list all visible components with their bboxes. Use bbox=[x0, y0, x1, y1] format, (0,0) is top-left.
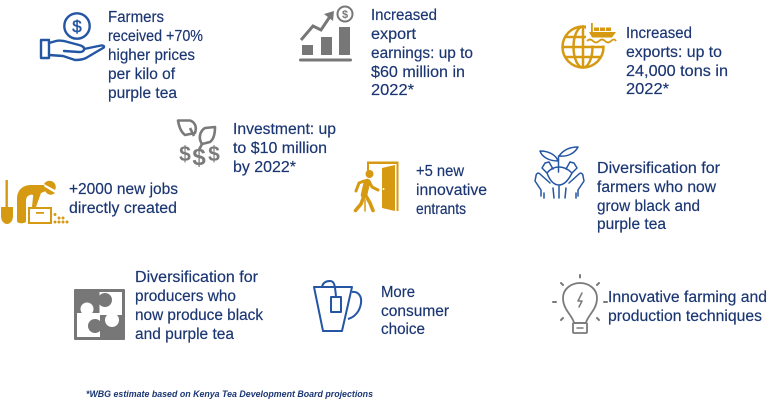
text: investment bbox=[233, 121, 336, 176]
text: diversification for farmers: purple tea bbox=[597, 216, 666, 233]
text: farmers prices: received +70% bbox=[108, 28, 203, 45]
icon: puzzle pieces bbox=[74, 289, 125, 340]
text: consumer choice: consumer bbox=[381, 303, 449, 320]
text: innovative techniques bbox=[608, 289, 767, 325]
icon: hand holding coin: $ bbox=[72, 17, 82, 36]
text: new entrants: +5 new bbox=[416, 163, 465, 180]
icon: light bulb bbox=[553, 275, 607, 333]
text: farmers prices: per kilo of bbox=[108, 66, 176, 83]
text: export earnings bbox=[371, 7, 473, 99]
text: export earnings: $60 million in bbox=[371, 64, 465, 81]
text: diversification for producers bbox=[135, 269, 263, 343]
text: investment: Investment: up bbox=[233, 121, 336, 138]
text: innovative techniques: production techniques bbox=[608, 308, 762, 325]
icon: rising bar chart with coin bbox=[299, 6, 352, 62]
text: consumer choice bbox=[381, 284, 449, 338]
text: farmers prices bbox=[108, 9, 203, 102]
text: increased exports: Increased bbox=[626, 25, 692, 42]
text: new jobs: +2000 new jobs bbox=[69, 181, 178, 198]
footnote: *WBG estimate based on Kenya Tea Development Board projections bbox=[86, 389, 373, 400]
text: new entrants bbox=[416, 163, 487, 218]
text: consumer choice: More bbox=[381, 284, 415, 301]
text: diversification for farmers: grow black and bbox=[597, 198, 700, 215]
text: increased exports bbox=[626, 25, 728, 98]
text: new jobs bbox=[69, 181, 178, 217]
icon: seedling with dollar signs: $ bbox=[192, 144, 206, 171]
text: farmers prices: higher prices bbox=[108, 47, 195, 64]
text: diversification for farmers: farmers who now bbox=[597, 179, 717, 196]
icon: globe with ship bbox=[562, 20, 618, 68]
text: export earnings: earnings: up to bbox=[371, 45, 473, 62]
text: increased exports: exports: up to bbox=[626, 44, 722, 61]
text: increased exports: 2022* bbox=[626, 81, 669, 98]
text: diversification for producers: now produce black bbox=[135, 307, 263, 324]
text: investment: by 2022* bbox=[233, 159, 296, 176]
text: diversification for producers: and purple tea bbox=[135, 326, 234, 343]
icon: tea mug bbox=[314, 281, 361, 331]
text: increased exports: 24,000 tons in bbox=[626, 63, 728, 80]
text: export earnings: Increased bbox=[371, 7, 437, 24]
icon: person entering door bbox=[356, 162, 398, 211]
icon: worker lifting box bbox=[1, 180, 68, 224]
text: export earnings: export bbox=[371, 26, 417, 43]
icon: seedling with dollar signs: $ bbox=[208, 143, 220, 166]
text: investment: to $10 million bbox=[233, 140, 327, 157]
text: consumer choice: choice bbox=[381, 321, 425, 338]
text: new entrants: innovative bbox=[416, 182, 487, 199]
icon: hands holding seedling bbox=[535, 147, 584, 198]
text: diversification for producers: Diversification for bbox=[135, 269, 258, 286]
text: farmers prices: purple tea bbox=[108, 85, 177, 102]
icon: seedling with dollar signs bbox=[178, 120, 220, 171]
text: export earnings: 2022* bbox=[371, 82, 414, 99]
text: new entrants: entrants bbox=[416, 201, 466, 218]
icon: seedling with dollar signs: $ bbox=[179, 143, 191, 166]
text: innovative techniques: Innovative farming and bbox=[608, 289, 767, 306]
text: new jobs: directly created bbox=[69, 200, 177, 217]
icon: rising bar chart with coin: $ bbox=[342, 9, 348, 21]
text: diversification for producers: producers who bbox=[135, 288, 236, 305]
icon: hand holding coin bbox=[41, 13, 104, 60]
text: diversification for farmers bbox=[597, 160, 720, 233]
text: diversification for farmers: Diversification for bbox=[597, 160, 720, 177]
text: farmers prices: Farmers bbox=[108, 9, 164, 26]
